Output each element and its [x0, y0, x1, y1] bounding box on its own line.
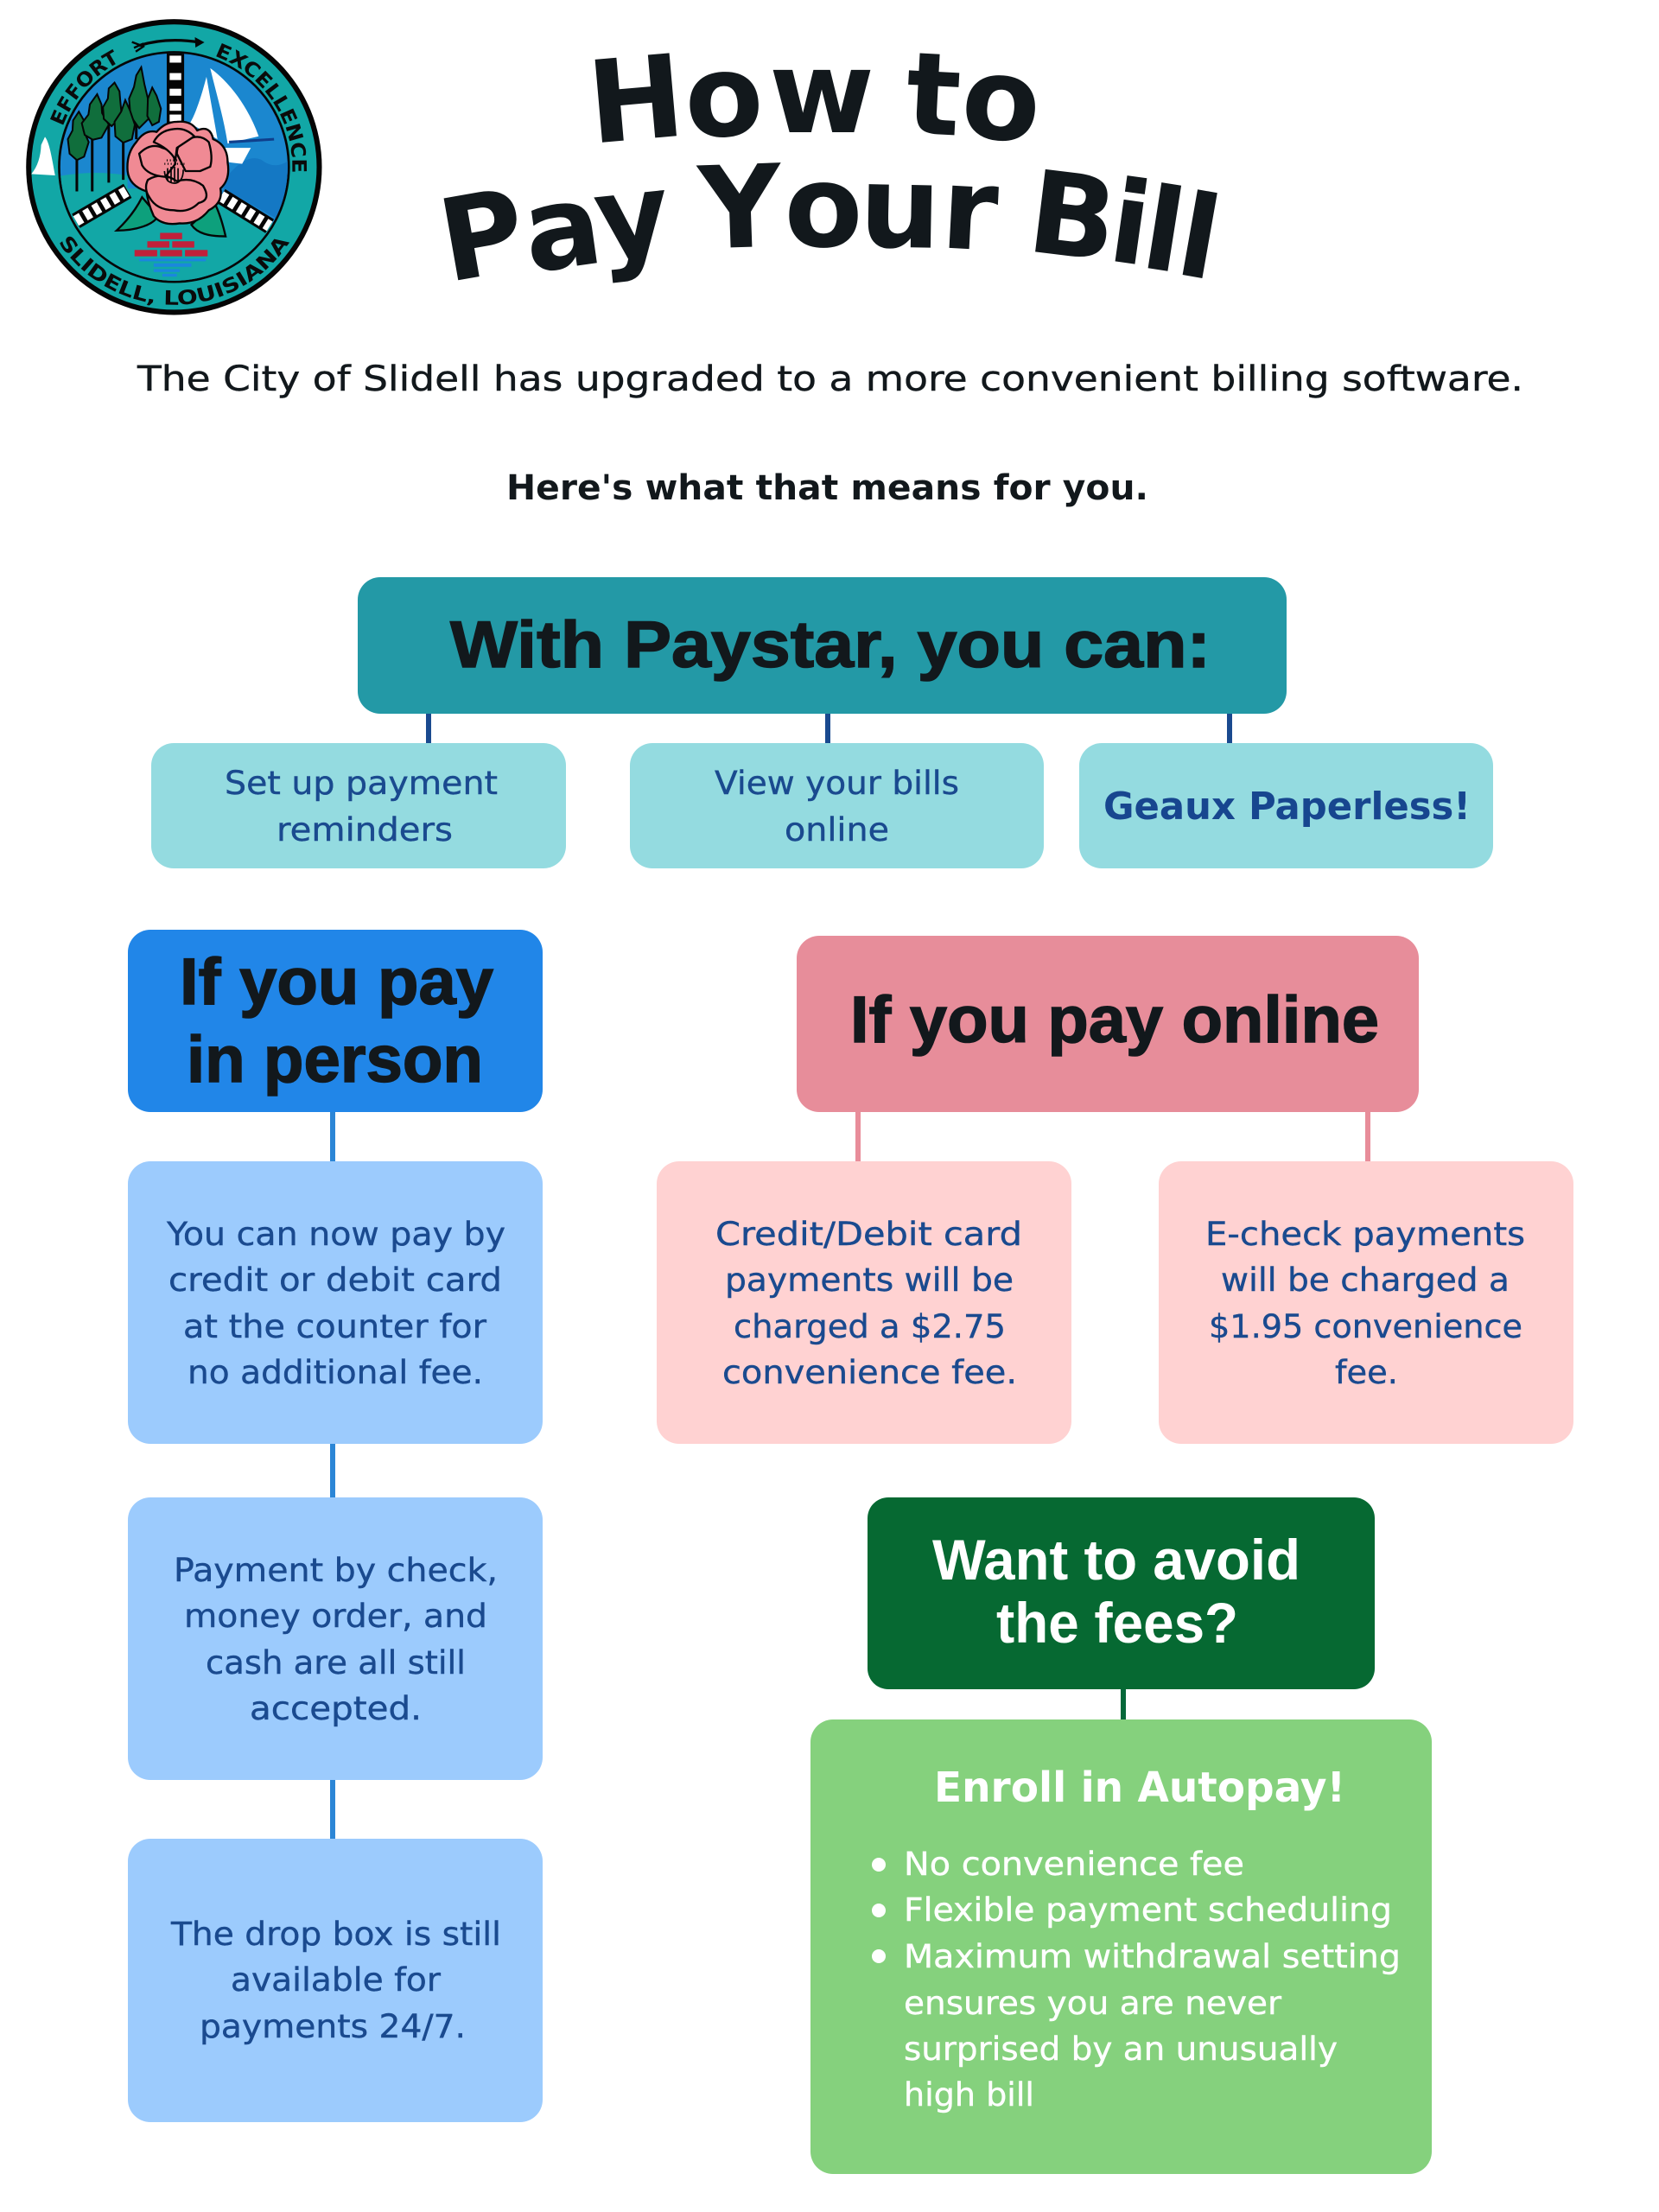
panel: e-check fee	[1159, 1161, 1573, 1444]
title: How to Pay Your Bill: a	[515, 157, 610, 300]
panel: e-check fee: will be charged a	[1221, 1262, 1510, 1299]
panel: pay by card in person: You can now pay by	[166, 1216, 505, 1253]
panel: drop box: The drop box is still	[170, 1916, 501, 1953]
panel: geaux paperless	[1079, 743, 1493, 868]
panel: view bills	[630, 743, 1044, 868]
connector: autopay	[1121, 1689, 1126, 1719]
panel: e-check fee: E-check payments	[1205, 1216, 1525, 1253]
tree trunks	[77, 122, 137, 191]
panel: payment reminders: reminders	[276, 811, 453, 849]
panel: want to avoid the fees: the fees?	[996, 1591, 1238, 1655]
panel: want to avoid the fees: Want to avoid	[932, 1528, 1300, 1592]
panel: pay by card in person	[128, 1161, 543, 1444]
panel: credit debit fee: Credit/Debit card	[715, 1216, 1022, 1253]
bricks	[135, 232, 207, 257]
panel: e-check fee: fee.	[1335, 1354, 1398, 1391]
panel: with paystar: With Paystar, you can:	[450, 608, 1211, 682]
panel: view bills: View your bills	[715, 765, 959, 802]
connectors: paystar	[426, 714, 1232, 744]
title: How to Pay Your Bill: w	[769, 27, 874, 160]
panel: payment reminders	[151, 743, 566, 868]
autopay heading: Enroll in Autopay!	[934, 1764, 1345, 1812]
trees	[68, 67, 161, 160]
title: How to Pay Your Bill: r	[938, 142, 1001, 278]
autopay bullet list: ensures you are never	[904, 1985, 1282, 2022]
title: How to Pay Your Bill: o	[681, 29, 766, 165]
connectors: online	[855, 1112, 1370, 1161]
autopay bullet list: Flexible payment scheduling	[904, 1891, 1392, 1929]
space shuttle	[31, 137, 55, 175]
water	[139, 258, 206, 276]
panel: drop box: available for	[231, 1961, 442, 1999]
camellia flower	[127, 122, 228, 224]
panel: with paystar	[358, 577, 1287, 714]
logo: City of Slidell seal	[26, 19, 321, 315]
intro text: The City of Slidell has upgraded to a more convenient billing software.	[137, 359, 1523, 399]
diagonal tracks	[76, 191, 128, 221]
seal text: EFFORT	[50, 48, 116, 124]
panel: view bills: online	[785, 811, 889, 849]
panel: want to avoid the fees	[868, 1497, 1375, 1689]
title: How to Pay Your Bill: l	[1135, 162, 1193, 300]
panel: credit debit fee: payments will be	[725, 1262, 1014, 1299]
title: How to Pay Your Bill: o	[957, 31, 1046, 170]
arrow	[132, 37, 205, 52]
panel: check money order cash: money order, and	[184, 1598, 487, 1635]
panel: if you pay online	[797, 936, 1419, 1112]
panel: check money order cash	[128, 1497, 543, 1780]
panel: pay by card in person: at the counter for	[183, 1308, 487, 1345]
panel: check money order cash: cash are all still	[206, 1644, 466, 1681]
title: How to Pay Your Bill: u	[858, 141, 942, 276]
panel: credit debit fee	[657, 1161, 1071, 1444]
title: How to Pay Your Bill: P	[429, 163, 535, 309]
title: How to Pay Your Bill: l	[1168, 169, 1230, 307]
logo: City of Slidell seal: SLIDELL, LOUISIANA	[60, 237, 290, 306]
title: How to Pay Your Bill: y	[588, 147, 676, 287]
panel: enroll in autopay	[810, 1719, 1432, 2174]
autopay bullet list: high bill	[904, 2076, 1034, 2113]
connectors: in person	[330, 1112, 335, 1839]
panel: credit debit fee: convenience fee.	[722, 1354, 1017, 1391]
panel: check money order cash: Payment by check,	[174, 1552, 498, 1589]
autopay bullet list: surprised by an unusually	[904, 2031, 1338, 2068]
panel: drop box	[128, 1839, 543, 2122]
panel: if you pay in person	[128, 930, 543, 1112]
panel: pay by card in person: no additional fee.	[188, 1354, 483, 1391]
title: How to Pay Your Bill: B	[1021, 146, 1124, 289]
panel: if you pay in person: in person	[187, 1023, 483, 1096]
sailboat	[190, 77, 218, 139]
title: How to Pay Your Bill	[429, 27, 1230, 309]
panel: geaux paperless: Geaux Paperless!	[1103, 785, 1471, 829]
panel: payment reminders: Set up payment	[225, 765, 498, 802]
title: How to Pay Your Bill: o	[785, 141, 862, 274]
panel: check money order cash: accepted.	[250, 1690, 422, 1727]
autopay bullet list: Maximum withdrawal setting	[904, 1938, 1401, 1975]
autopay bullet list	[872, 1846, 1401, 2113]
title: How to Pay Your Bill: t	[903, 28, 964, 163]
leaves	[117, 197, 226, 237]
panel: e-check fee: $1.95 convenience	[1209, 1308, 1522, 1345]
logo: City of Slidell seal: EXCELLENCE	[216, 43, 307, 172]
title: How to Pay Your Bill: H	[582, 30, 690, 171]
title: How to Pay Your Bill: Y	[695, 140, 785, 276]
panel: if you pay online: If you pay online	[850, 983, 1379, 1057]
railroad track top	[167, 49, 184, 124]
flower stamens	[164, 161, 186, 183]
title: How to Pay Your Bill: i	[1102, 156, 1159, 293]
panel: drop box: payments 24/7.	[200, 2008, 466, 2045]
autopay bullet list: No convenience fee	[904, 1846, 1244, 1883]
panel: if you pay in person: If you pay	[180, 945, 493, 1019]
intro bold line: Here's what that means for you.	[506, 468, 1148, 508]
panel: pay by card in person: credit or debit card	[168, 1262, 502, 1299]
panel: credit debit fee: charged a $2.75	[734, 1308, 1006, 1345]
